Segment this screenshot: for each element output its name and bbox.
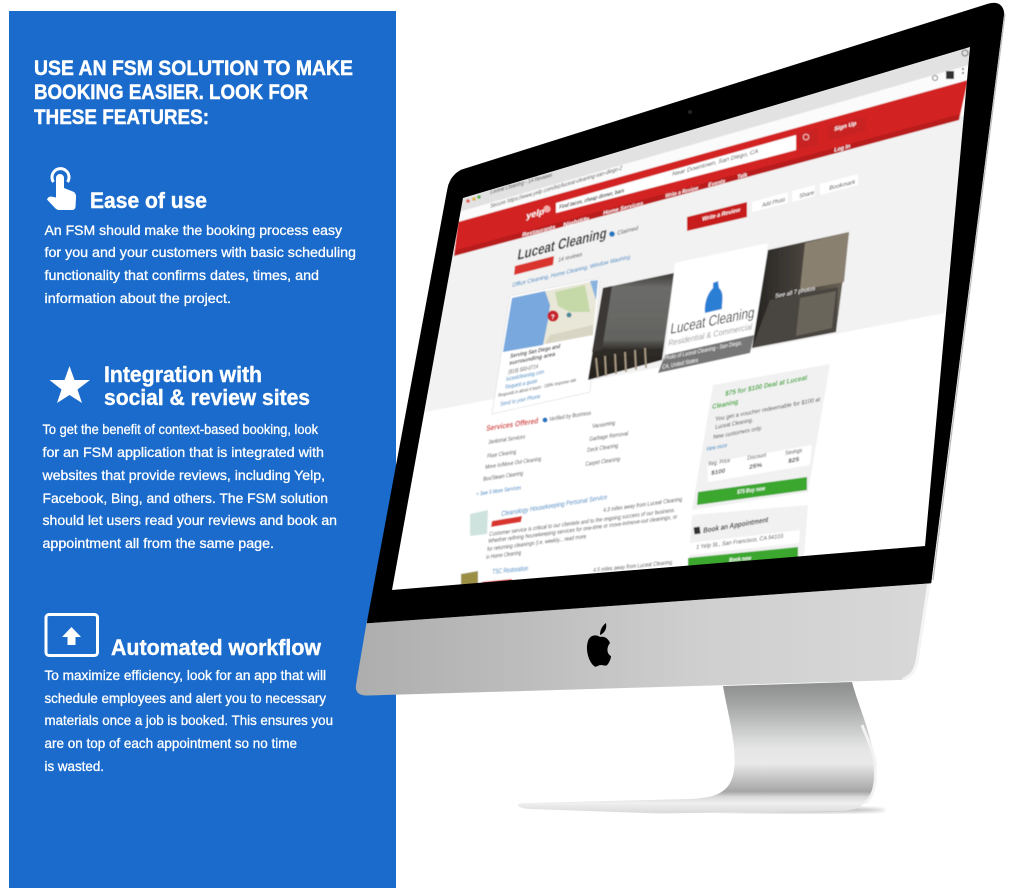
text block: automated workflow: is wasted. <box>44 758 104 774</box>
buy button: $75 Buy now <box>737 486 766 496</box>
listing: cleanology: for returning cleanings (i.e. weekly... read more <box>487 534 587 553</box>
deal prices: Discount <box>747 453 767 462</box>
sign in: Sign Up <box>834 120 857 133</box>
browser tab strip <box>459 47 970 212</box>
icon: upload screen <box>46 614 98 656</box>
business details: Request a quote <box>505 378 538 391</box>
buy button <box>697 477 807 505</box>
category links: Office Cleaning, Home Cleaning, Window Washing <box>512 254 631 289</box>
text block: integration: To get the benefit of context-based booking, look <box>42 421 319 437</box>
deal prices: Savings <box>785 448 802 457</box>
heading: BOOKING EASIER. LOOK FOR <box>34 81 308 104</box>
business details: (619) 500-0714 <box>508 363 539 376</box>
text block: integration: Facebook, Bing, and others. The FSM solution <box>42 490 328 506</box>
star rating: 14 reviews <box>558 251 583 264</box>
text block: automated workflow: are on top of each appointment so no time <box>44 735 297 751</box>
listing: cleanology: 4.3 miles away from Luceat Cleaning <box>603 497 682 514</box>
browser address bar: Secure https://www.yelp.com/biz/luceat-cleaning-san-diego-2 <box>490 165 623 210</box>
text block: ease of use <box>44 222 356 306</box>
business details: Send to your Phone <box>500 393 541 408</box>
photo: see all photos: See all 7 photos <box>775 285 816 300</box>
bezel edge highlight <box>933 14 1005 580</box>
services offered: Deck Cleaning <box>587 443 618 454</box>
business details: Serving San Diego and <box>510 343 561 360</box>
chin highlight <box>903 582 929 679</box>
business details <box>498 343 577 408</box>
info card <box>492 278 600 414</box>
services offered: + See 5 More Services <box>476 485 521 498</box>
heading: THESE FEATURES: <box>34 106 209 129</box>
heading <box>34 57 353 129</box>
body grey band <box>425 115 965 412</box>
yelp nav: Restaurants <box>522 224 556 239</box>
subheading: ease of use: Ease of use <box>90 188 207 213</box>
action buttons: Bookmark <box>829 178 857 192</box>
text block: integration <box>41 421 337 551</box>
action buttons: Share <box>799 189 815 200</box>
photo caption: Photo of Luceat Cleaning - San Diego, <box>664 339 743 362</box>
yelp nav: Events <box>708 178 726 189</box>
stand <box>518 682 885 814</box>
subheading: integration: social & review sites <box>104 385 310 410</box>
text block: integration: for an FSM application that is integrated with <box>42 444 324 460</box>
icon: iMac computer <box>356 3 1005 813</box>
business details: surrounding area <box>509 351 556 367</box>
search field text <box>559 148 760 211</box>
text block: integration: websites that provide reviews, including Yelp, <box>41 467 325 483</box>
photo: logo card: Luceat Cleaning <box>670 304 756 338</box>
listing: tsc restoration: 4.5 miles away from Luceat Cleaning <box>593 560 672 574</box>
text block: integration: appointment all from the same page. <box>42 535 274 551</box>
deal prices: $100 <box>711 468 726 477</box>
text block: integration: should let users read your reviews and book an <box>42 512 337 528</box>
silver chin <box>356 580 931 696</box>
deal box: You get a voucher redeemable for $100 at <box>715 397 821 423</box>
yelp nav <box>522 171 748 239</box>
services offered: Garbage Removal <box>589 431 628 443</box>
deal box: Luceat Cleaning. <box>715 418 754 431</box>
subheading: integration: Integration with <box>104 362 262 387</box>
listing: cleanology: Whether refining housekeeping services for one-time or move-in/move-out cleanings, or <box>488 514 677 545</box>
yelp nav: Nightlife <box>563 215 590 229</box>
book an appointment box: Book now <box>729 556 752 564</box>
photo: office <box>588 273 674 380</box>
photo: logo card: Residential & Commercial <box>668 321 753 348</box>
text block: automated workflow: schedule employees and alert you to necessary <box>44 690 326 706</box>
icon: pointing hand <box>47 169 76 210</box>
action buttons: Add Photo <box>762 196 786 209</box>
listing: cleanology: Customer service is critical to our clientele and to the ongoing success of our business. <box>489 508 676 538</box>
action buttons <box>752 174 858 212</box>
photo: logo card <box>665 243 768 357</box>
deal box <box>692 364 830 510</box>
text block: automated workflow: materials once a job is booked. This ensures you <box>44 712 333 728</box>
search field text: Find tacos, cheap dinner, bars <box>559 187 625 211</box>
business details: luceatcleaning.com <box>506 368 545 383</box>
subheading: automated workflow: Automated workflow <box>111 635 322 660</box>
write a review button <box>687 202 747 231</box>
deal prices: $25 <box>788 457 800 465</box>
deal box: $75 for $100 Deal at Luceat <box>725 374 808 398</box>
listing: cleanology: Cleanology Housekeeping Personal Service <box>501 494 608 518</box>
apple logo <box>587 623 611 667</box>
search field <box>556 135 796 213</box>
deal prices <box>707 445 812 482</box>
listing: cleanology <box>470 494 682 561</box>
webcam <box>688 110 692 114</box>
services offered: Move In/Move Out Cleaning <box>485 457 541 471</box>
heading: USE AN FSM SOLUTION TO MAKE <box>34 57 353 80</box>
photo caption: CA, United States <box>662 357 699 371</box>
book an appointment box: Book an Appointment <box>703 515 769 535</box>
write a review button: Write a Review <box>702 207 741 223</box>
text block: ease of use: information about the project. <box>44 290 231 306</box>
yelp logo: yelp <box>526 206 546 221</box>
header lower shade <box>454 114 960 256</box>
services offered: Services Offered <box>486 416 539 433</box>
text block: automated workflow: To maximize efficiency, look for an app that will <box>44 667 326 683</box>
star rating <box>514 251 583 275</box>
deal box: New customers only. <box>713 426 763 441</box>
map: ? <box>551 315 555 321</box>
services offered: Janitorial Services <box>488 434 525 446</box>
photo caption <box>658 335 754 373</box>
yelp nav: Talk <box>737 171 748 181</box>
sign in <box>828 116 866 154</box>
deal box: View more <box>706 443 728 453</box>
listing: tsc restoration: TSC Restoration <box>492 565 529 576</box>
services offered: Verified by Business <box>549 411 591 423</box>
text block: ease of use: for you and your customers with basic scheduling <box>44 244 356 260</box>
services offered: Vacuuming <box>592 421 615 430</box>
business name: Luceat Cleaning <box>516 225 608 264</box>
panel: blue features sidebar <box>9 11 396 888</box>
subheading: integration <box>104 362 310 410</box>
deal prices: Reg. Price <box>708 458 731 468</box>
sign in: Log In <box>834 143 851 154</box>
listing: cleanology: in Home Cleaning <box>486 550 521 561</box>
deal prices: 25% <box>749 463 763 471</box>
services offered: Box/Steam Cleaning <box>483 471 523 483</box>
business name: Claimed <box>617 225 639 237</box>
text block: automated workflow <box>44 667 333 774</box>
search button <box>798 130 818 149</box>
book an appointment box <box>687 505 808 566</box>
browser address bar <box>458 50 969 222</box>
deal box: Cleaning <box>712 398 739 411</box>
text block: ease of use: An FSM should make the booking process easy <box>44 222 342 238</box>
yelp red header <box>454 80 968 256</box>
black bezel <box>367 3 1004 623</box>
browser address bar: Luceat Cleaning - 14 Reviews <box>490 172 553 196</box>
business details: Responds in about 4 hours · 100% response rate <box>498 377 577 399</box>
photo: see all photos <box>752 232 849 348</box>
services offered <box>476 411 628 498</box>
yelp nav: Home Services <box>603 200 644 217</box>
listing: tsc restoration <box>460 560 673 584</box>
text block: ease of use: functionality that confirms dates, times, and <box>44 267 319 283</box>
yelp nav: Write a Review <box>665 185 699 200</box>
services offered: Carpet Cleaning <box>585 457 620 468</box>
search field text: Near Downtown, San Diego, CA <box>672 148 760 178</box>
icon: star <box>50 366 90 403</box>
book an appointment box: 1 Yelp St., San Francisco, CA 94103 <box>696 534 784 551</box>
screen: Yelp page <box>385 40 975 595</box>
services offered: Floor Cleaning <box>487 450 516 460</box>
